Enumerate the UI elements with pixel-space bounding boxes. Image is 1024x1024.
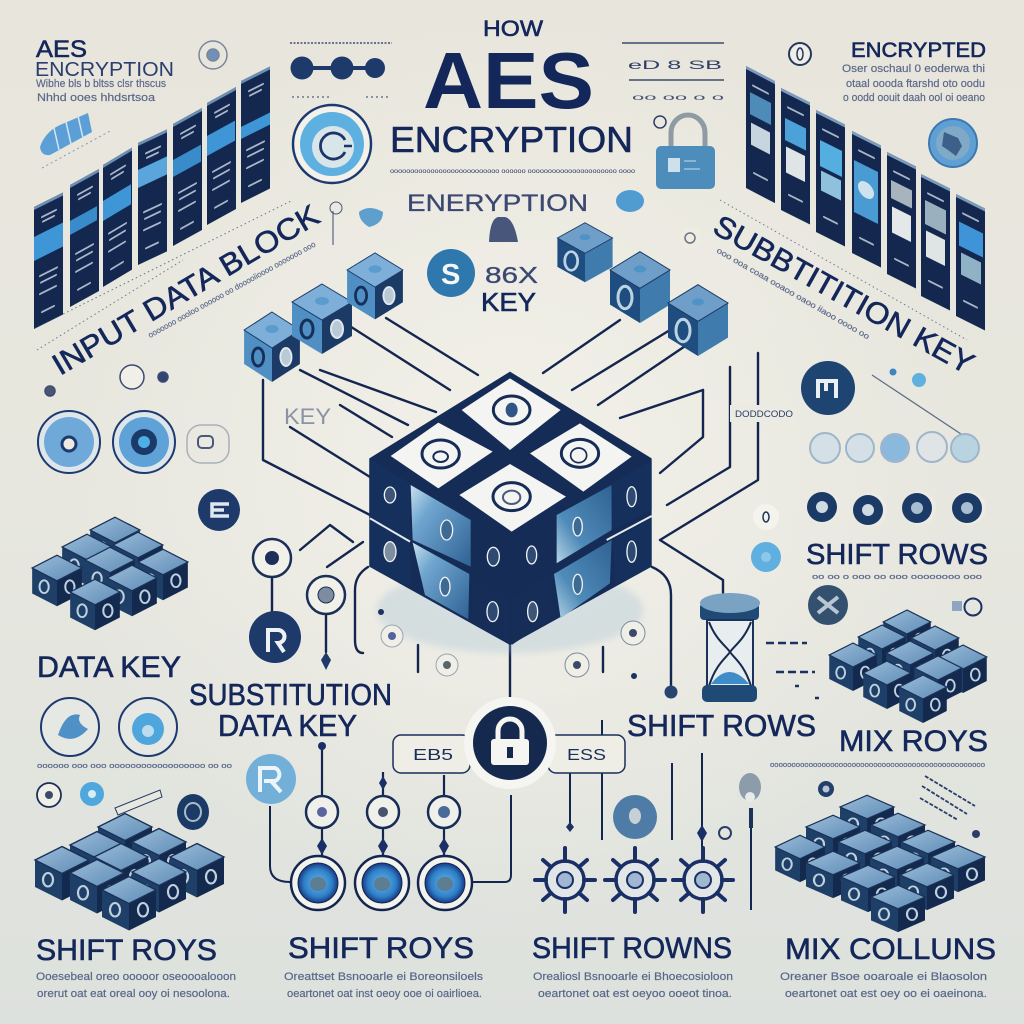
panel group: encrypted blocks — [746, 66, 985, 330]
column: shift rowns — [532, 932, 733, 1000]
icon: data key ring 1 — [41, 698, 99, 756]
icon: small rings right — [751, 504, 781, 572]
title: How AES Encryption — [390, 16, 635, 175]
heading: substitution key: SUBBTITITION KEY — [708, 209, 979, 381]
title word: AES: AES — [423, 36, 594, 125]
grid: cubes bottom left — [35, 814, 224, 930]
caption: second line: Nhhd ooes hhdsrtsoa — [37, 92, 156, 104]
title word: how: HOW — [483, 16, 543, 41]
heading: mix roys: MIX ROYS — [839, 725, 988, 758]
small data cubes right — [557, 223, 728, 356]
panel: encrypted block 5 — [887, 152, 916, 288]
icon: small post — [739, 773, 761, 828]
icon: rule and glyph row above padlock — [622, 43, 725, 102]
icon: rule and glyph row above padlock: eD 8 SB — [628, 58, 722, 72]
icon: ring 2 — [113, 411, 175, 473]
pill: EB5 — [393, 735, 470, 773]
icon row: small rings — [306, 796, 460, 828]
heading: SHIFT ROYS — [288, 932, 474, 965]
caption line 1: Oreattset Bsnooarle ei Boreonsiloels — [284, 971, 484, 983]
caption line 2: oeartonet oat est oeyoo ooeot tinoa. — [538, 988, 732, 1000]
caption line 2: orerut oat eat oreal ooy oi nesoolona. — [37, 988, 230, 1000]
heading: encryption: ENCRYPTION — [35, 59, 174, 81]
lock connector lines — [270, 720, 751, 910]
icon: grey-blue badge — [613, 795, 657, 839]
panel: input block 4 — [138, 129, 167, 265]
label: small data pill: DODDCODO — [735, 409, 793, 420]
face glyphs — [384, 487, 636, 622]
pill: EB5: EB5 — [413, 747, 453, 764]
heading: shift rows right: SHIFT ROWS — [806, 539, 988, 571]
icon: rule and glyph row above padlock: oo oo o o — [632, 93, 725, 102]
icon: padlock top — [654, 115, 715, 189]
icon: blue medallion — [929, 119, 977, 167]
panel: input block 2 — [70, 169, 99, 307]
dots beside hourglass — [766, 643, 819, 698]
panel: encrypted block 7 — [956, 194, 985, 330]
divider caption right: oooooooooooooooooooooooooooooooooooooooooooooooooo — [770, 762, 985, 769]
caption line 2: oeartonet oat est oey oo ei oaeinona. — [785, 988, 987, 1000]
heading: data key: DATA KEY — [37, 651, 181, 684]
panel: encrypted block 3 — [816, 110, 845, 246]
left face tiles — [369, 458, 510, 645]
icon: small rings above left row — [45, 365, 168, 396]
heading block: encrypted top right — [842, 39, 986, 104]
panel: encrypted block 1 — [746, 66, 775, 203]
icon row: blue eye rings — [291, 856, 472, 910]
heading: encryption subtitle: ENERYPTION — [407, 190, 588, 217]
caption line 1: Orealiosl Bsnooarle ei Bhoecosioloon — [533, 971, 733, 983]
small scattered rings above lock — [378, 609, 678, 698]
icon group: bottom left small badges — [37, 782, 209, 830]
dotted rule above substitution key — [720, 200, 967, 340]
icon: S badge: S — [441, 259, 460, 291]
heading: AES: AES — [36, 36, 87, 63]
caption: along input data block: ooooooo oooloo oooooo oo dooooiioooo ooooooo ooo — [147, 239, 318, 340]
grid: cubes bottom right — [775, 795, 985, 932]
label: 86X: 86X — [485, 262, 538, 288]
icon: white ring 2 — [307, 576, 345, 614]
right column icons: small blue marks — [872, 368, 970, 440]
heading: encrypted: ENCRYPTED — [851, 39, 986, 62]
heading: MIX COLLUNS — [785, 933, 996, 966]
icon: diamond knob — [321, 652, 331, 670]
title rule caption: ooooooooooooooooooooooooooo oooooo oooooooooooooooooooooo oooo — [390, 168, 635, 175]
caption: along substitution key: ooo ooa coaa ooaoo oaoo iiaoo oooo oo — [715, 246, 872, 342]
icon: ring top right — [789, 43, 811, 65]
cube: left 1 — [244, 312, 300, 382]
icon: blue dots near subtitle — [330, 190, 701, 249]
icon: navy R badge — [249, 611, 301, 663]
label: faint key: KEY — [284, 404, 331, 429]
caption: encrypted line 2: otaal oooda ftarshd oto oodu — [846, 78, 985, 90]
icon row: left rings — [38, 411, 229, 473]
icon: dumbbell chain — [290, 43, 392, 97]
caption lines: Wibhe bls b bltss clsr thscus — [36, 78, 166, 90]
right column icons: faint swirl row — [810, 432, 979, 463]
panel: input block 1 — [34, 192, 63, 329]
icon: faint rounded badge — [187, 425, 229, 463]
column: mix colluns — [780, 933, 996, 1000]
label: small data pill — [730, 405, 796, 422]
icon: hourglass — [700, 593, 760, 702]
icon: small blue wedge — [40, 113, 112, 168]
panel: input block 5 — [173, 108, 202, 246]
heading: SHIFT ROWNS — [532, 932, 732, 965]
icon: main padlock — [464, 697, 556, 789]
heading block: AES encryption top left — [35, 36, 174, 90]
panel: encrypted block 4 — [852, 131, 881, 268]
right column icon: navy M badge — [801, 361, 855, 415]
icon row: helm wheels — [535, 848, 733, 912]
pill: ESS: ESS — [567, 747, 606, 764]
right face tiles — [510, 460, 652, 645]
small data cubes left — [244, 253, 403, 382]
heading: substitution: SUBSTITUTION — [189, 677, 392, 712]
right column icons: navy badge row — [807, 490, 986, 527]
grid: cubes upper left — [32, 517, 188, 630]
cube: right 3 — [668, 285, 728, 356]
heading: SHIFT ROYS — [36, 934, 217, 967]
panel: encrypted block 2 — [781, 88, 810, 224]
white top tiles with eye icons — [391, 378, 632, 532]
dotted rule above input data block — [35, 200, 293, 350]
caption line 1: Oreaner Bsoe ooaroale ei Blaosolon — [780, 971, 987, 983]
cube: right 1 — [557, 223, 613, 282]
caption: encrypted line 3: o oodd oouit daah ool oi oeano — [843, 92, 985, 104]
connector knobs — [317, 742, 707, 855]
icon group: scatter above bottom right cubes — [719, 776, 980, 839]
connector lines to central cube — [263, 316, 758, 703]
cube: left 3 — [347, 253, 403, 319]
icon: S badge — [427, 249, 475, 297]
icon: navy X badge — [808, 585, 848, 625]
heading: input data block: INPUT DATA BLOCK — [47, 199, 325, 382]
pill: ESS — [548, 735, 625, 773]
panel: input block 6 — [207, 87, 236, 225]
column: shift roys 2 — [284, 932, 484, 1000]
cube shadow — [377, 567, 643, 653]
icon: white ring 1 — [253, 539, 291, 577]
icon: ring 1 — [38, 411, 100, 473]
cube: right 2 — [610, 252, 670, 323]
icon: C ring — [293, 105, 371, 183]
divider caption left: oooooo ooo ooo oooooooooooooooooo oo oo — [37, 763, 232, 770]
cube body — [369, 372, 652, 645]
central AES cube — [369, 372, 652, 653]
label: key: KEY — [481, 287, 536, 317]
panel group: input data blocks — [34, 66, 270, 329]
heading: shift rows centre: SHIFT ROWS — [627, 708, 816, 743]
caption line 1: Ooesebeal oreo ooooor oseoooalooon — [36, 971, 236, 983]
grid: cubes right — [829, 610, 987, 723]
icon: data key ring 2 — [119, 698, 177, 756]
icon: blue R badge — [246, 754, 296, 804]
icon: small ring by cubes — [952, 598, 982, 616]
panel: encrypted block 6 — [921, 174, 950, 310]
title word: encryption: ENCRYPTION — [390, 119, 633, 160]
cube: left 2 — [292, 284, 352, 354]
icon: navy e badge — [198, 489, 240, 531]
caption line 2: oeartonet oat inst oeoy ooe oi oairlioea. — [287, 988, 482, 1000]
heading: data key centre: DATA KEY — [218, 708, 357, 743]
column: shift roys 1 — [36, 934, 236, 1000]
panel: input block 7 — [241, 66, 270, 203]
icon: faint ring top left — [199, 41, 227, 69]
caption under shift rows: oo oo o ooo oo ooo oooooooo ooo — [812, 574, 982, 581]
panel: input block 3 — [103, 148, 132, 287]
caption: encrypted line 1: Oser oschaul 0 eoderwa thi — [842, 63, 985, 75]
